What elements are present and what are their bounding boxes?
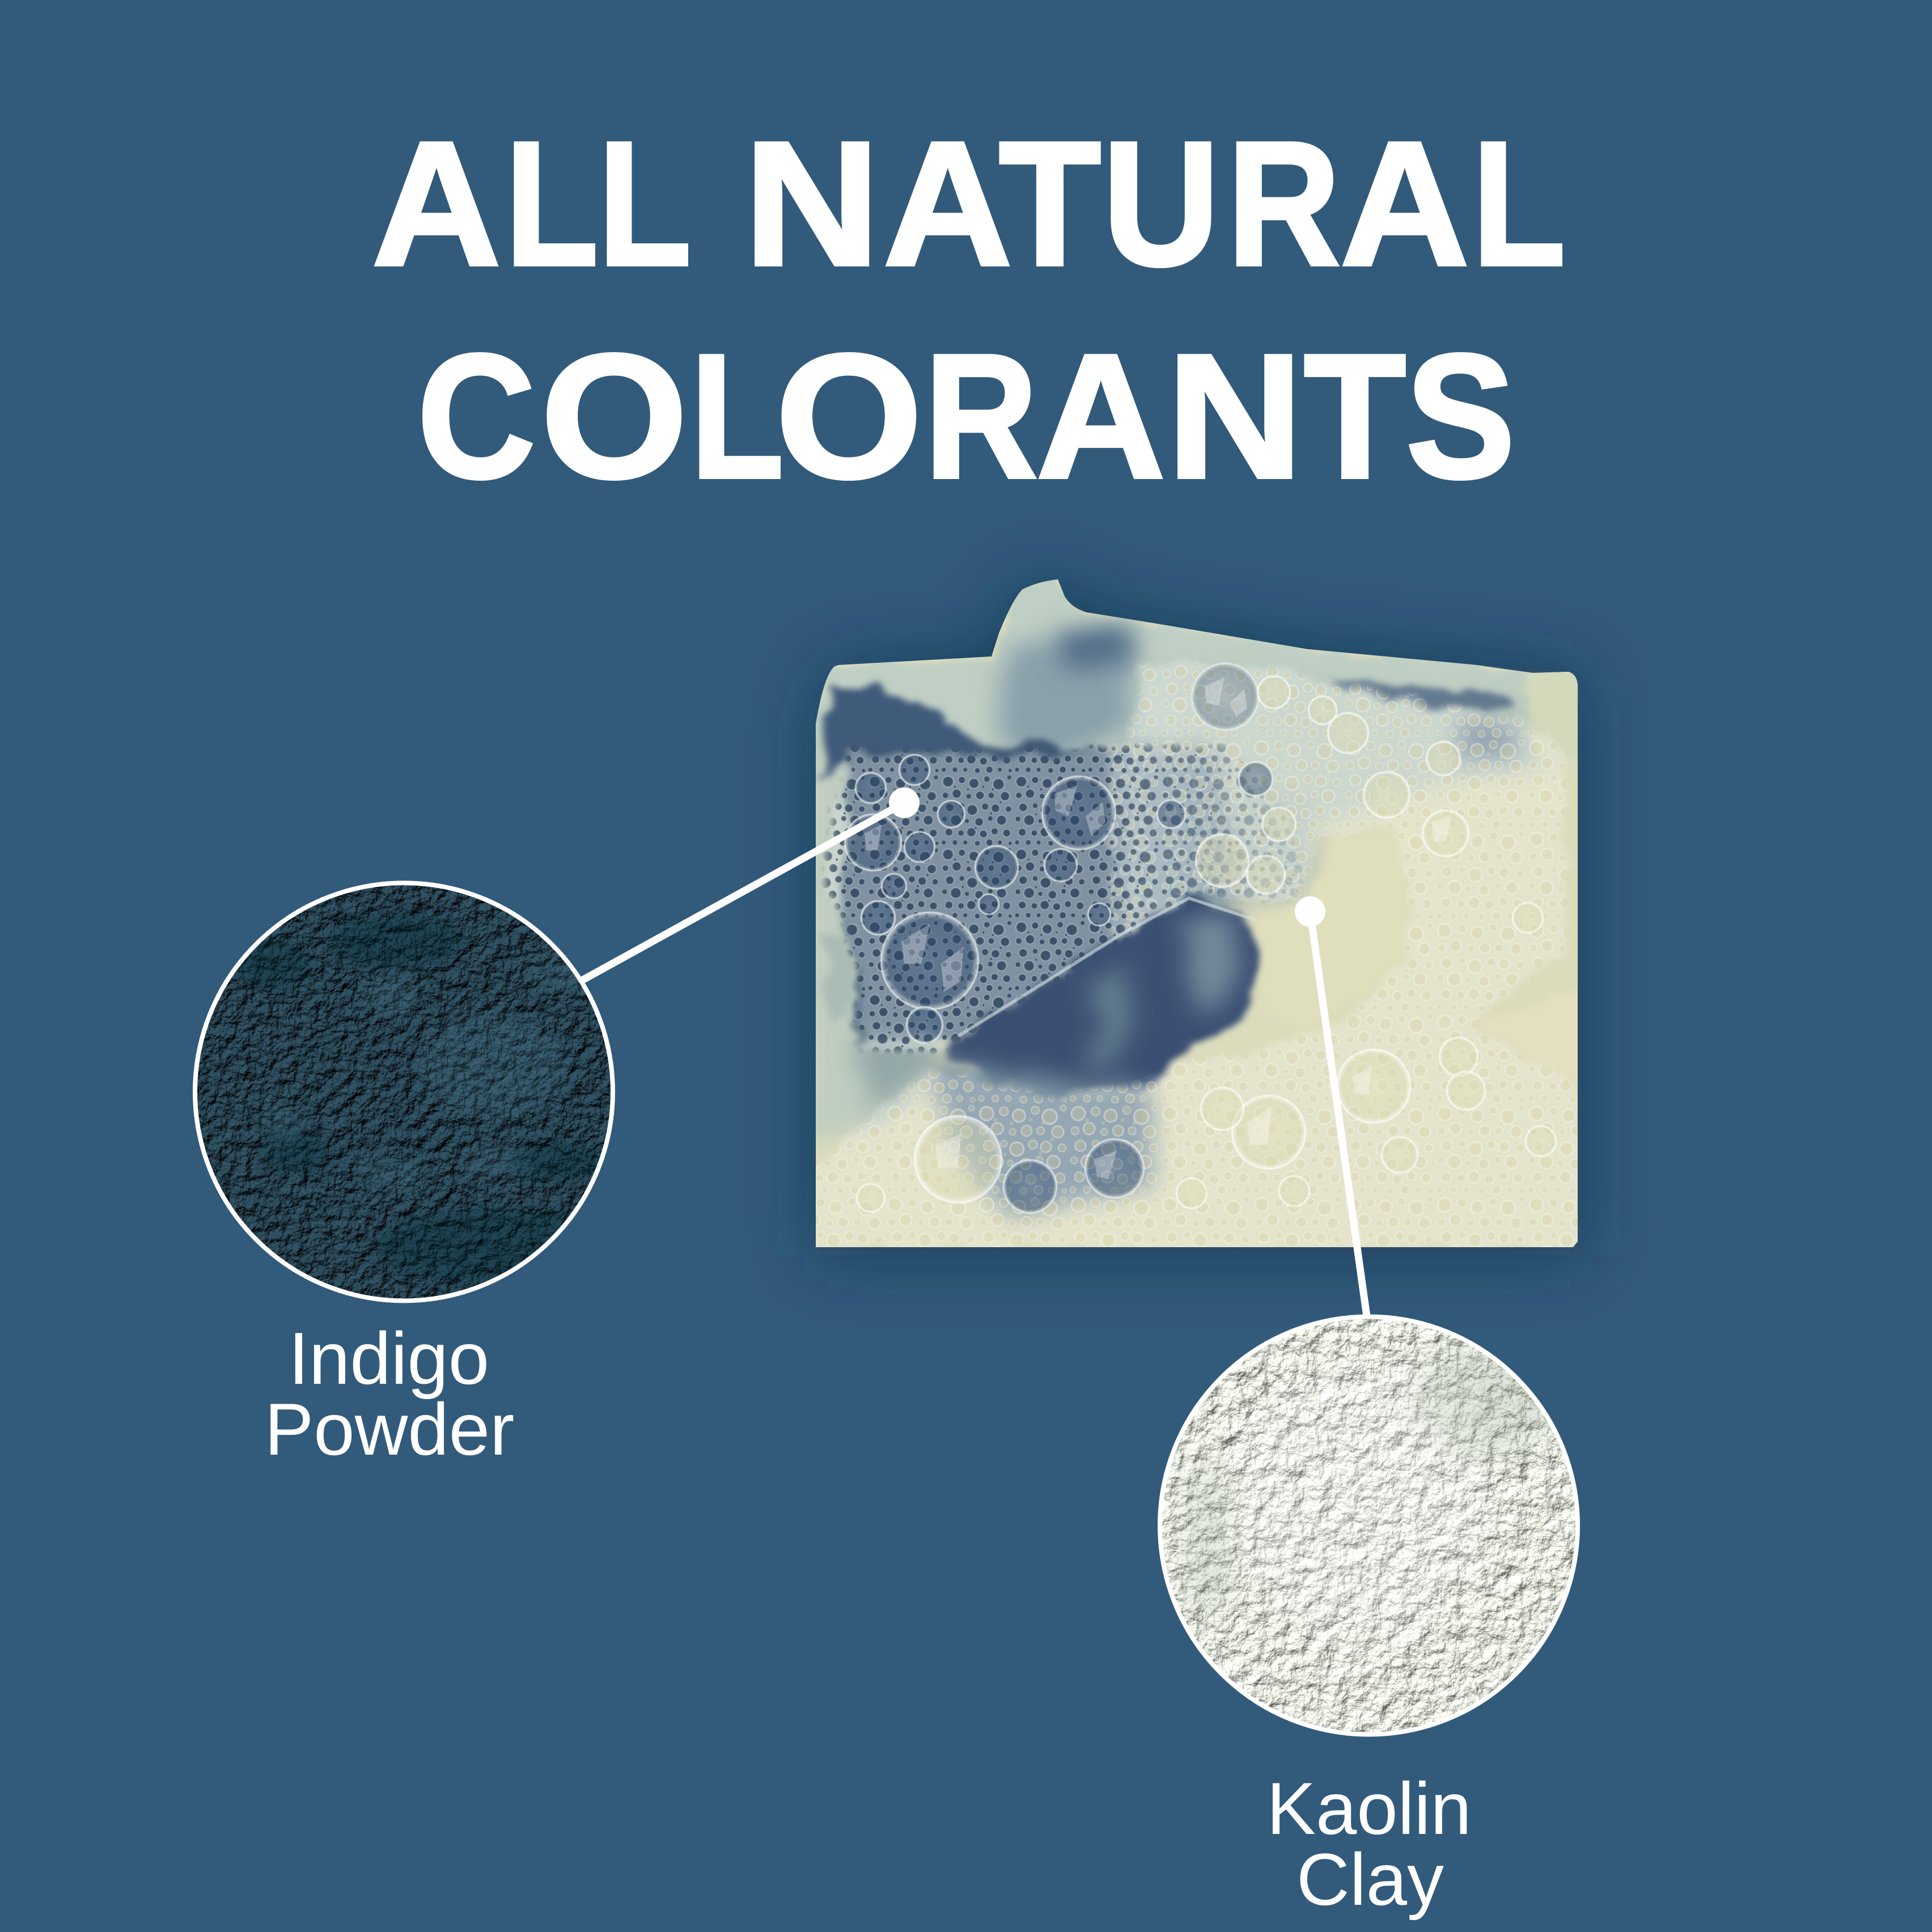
title: O [541, 318, 688, 515]
title: L [1472, 105, 1566, 303]
title: C [417, 318, 535, 515]
title: L [505, 105, 599, 303]
bubble highlights [865, 677, 1451, 1179]
indigo marker dot [889, 787, 920, 818]
indigo connector line [582, 803, 904, 980]
title: T [1304, 318, 1406, 515]
title: U [1103, 105, 1219, 303]
label: Kaolin Clay: Clay [1297, 1838, 1444, 1921]
large bubbles over cream [857, 676, 1556, 1212]
label: Indigo Powder: Powder [265, 1388, 514, 1471]
large bubbles over indigo [845, 663, 1273, 1213]
foam: dark bubbles [794, 556, 1599, 1270]
title: T [999, 105, 1101, 303]
foam edge highlight [958, 898, 1256, 1036]
title: L [598, 105, 692, 303]
indigo powder swatch [193, 882, 624, 1304]
title: S [1406, 318, 1515, 515]
label: Indigo Powder: Indigo [289, 1317, 489, 1400]
label: Kaolin Clay: Kaolin [1266, 1767, 1472, 1850]
title: A [883, 105, 1012, 303]
title: A [372, 105, 501, 303]
soap bar [816, 579, 1578, 1247]
label: Kaolin Clay [1266, 1767, 1472, 1921]
foam: light bubbles [816, 658, 1578, 1247]
title: N [1167, 318, 1303, 515]
kaolin clay swatch [1158, 1315, 1580, 1737]
title: R [1227, 105, 1340, 303]
title: A [1036, 318, 1166, 515]
soap shadow [816, 579, 1582, 1256]
title: R [925, 318, 1037, 515]
kaolin connector line [1310, 912, 1367, 1316]
title: L [690, 318, 784, 515]
title: O [776, 318, 922, 515]
title: N [744, 105, 880, 303]
soap colour swirls [804, 574, 1595, 1211]
label: Indigo Powder [265, 1317, 514, 1471]
kaolin marker dot [1295, 896, 1325, 927]
title [372, 105, 1566, 515]
title: A [1340, 105, 1469, 303]
